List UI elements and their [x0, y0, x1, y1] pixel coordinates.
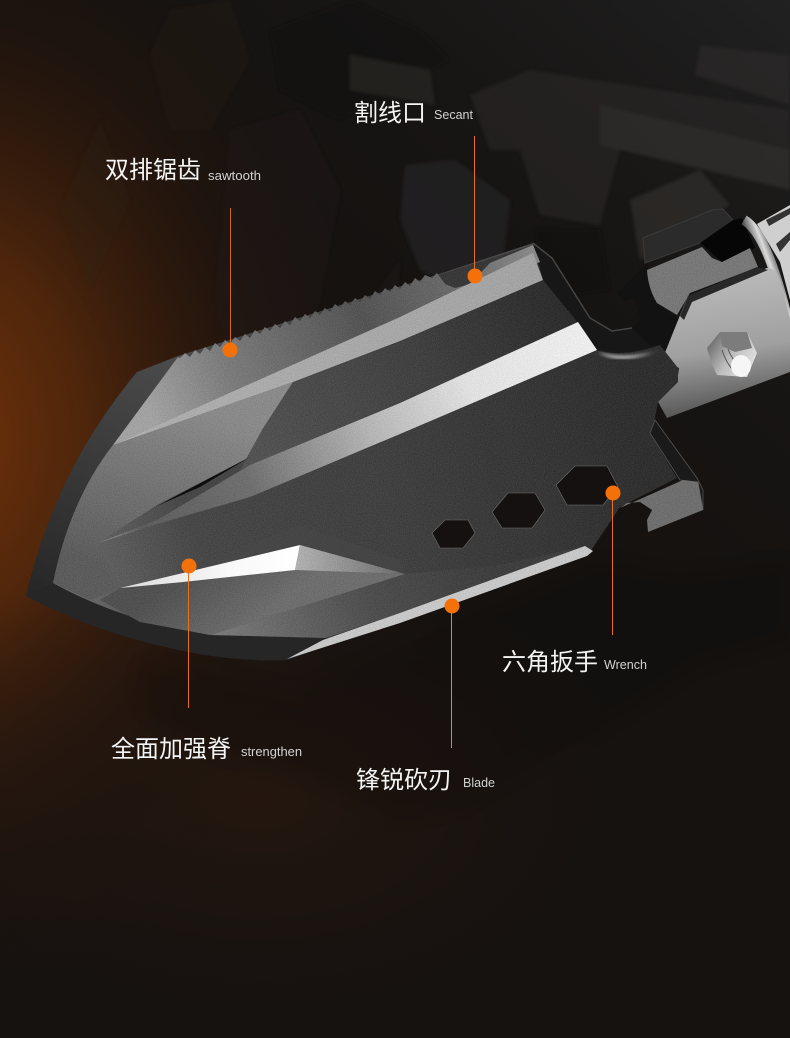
plate top edge	[680, 267, 768, 320]
callout: blade: 锋锐砍刃	[356, 767, 452, 794]
callout: wrench: Wrench	[604, 657, 647, 672]
bottom edge band	[26, 583, 330, 660]
lower right shoulder	[620, 480, 703, 532]
top serrated facet	[113, 245, 540, 445]
shaft: handle stripes	[766, 208, 790, 252]
callout: double sawtooth: sawtooth	[208, 168, 261, 183]
callout: double sawtooth: 双排锯齿	[105, 157, 201, 184]
dark upper facet	[240, 280, 578, 470]
callout: secant: Secant	[434, 107, 473, 122]
lower right rim	[650, 420, 703, 510]
callout: wrench	[502, 486, 647, 676]
shaft: metal ring	[744, 220, 788, 322]
soldiers backdrop	[60, 0, 790, 410]
callout: blade: Blade	[463, 775, 495, 790]
bracket: bolted plate	[657, 268, 790, 418]
slit shadow	[157, 457, 250, 506]
spear highlight	[120, 545, 405, 588]
blade outer bevel	[26, 243, 590, 660]
lower light facet	[100, 570, 405, 635]
callout: wrench: 六角扳手	[502, 649, 598, 676]
hex holes	[432, 466, 618, 548]
callout: strengthen: 全面加强脊	[111, 736, 231, 763]
bracket: upper clamp	[643, 209, 758, 315]
neck rim	[533, 243, 660, 353]
shovel illustration	[26, 205, 790, 660]
callout: secant	[354, 100, 482, 284]
second ridge band	[98, 322, 597, 543]
callout: blade	[356, 598, 495, 794]
faint rim above spear	[183, 525, 405, 574]
callout: secant: 割线口	[354, 100, 426, 127]
neck highlight	[598, 350, 660, 359]
callout: strengthen: strengthen	[241, 744, 302, 759]
bolt	[707, 332, 757, 377]
callout: strengthen	[111, 558, 302, 763]
lower facet under the spear	[210, 546, 585, 638]
light diamond facet	[53, 382, 293, 600]
shovel shadow	[135, 560, 790, 822]
callout: double sawtooth	[105, 157, 261, 358]
shaft: handle	[757, 205, 790, 300]
rim edge line	[533, 243, 632, 331]
bracket: dark side lobe	[617, 263, 677, 362]
upper bright strip	[113, 253, 543, 445]
cutting edge strip	[287, 546, 593, 659]
blade face	[53, 245, 678, 638]
